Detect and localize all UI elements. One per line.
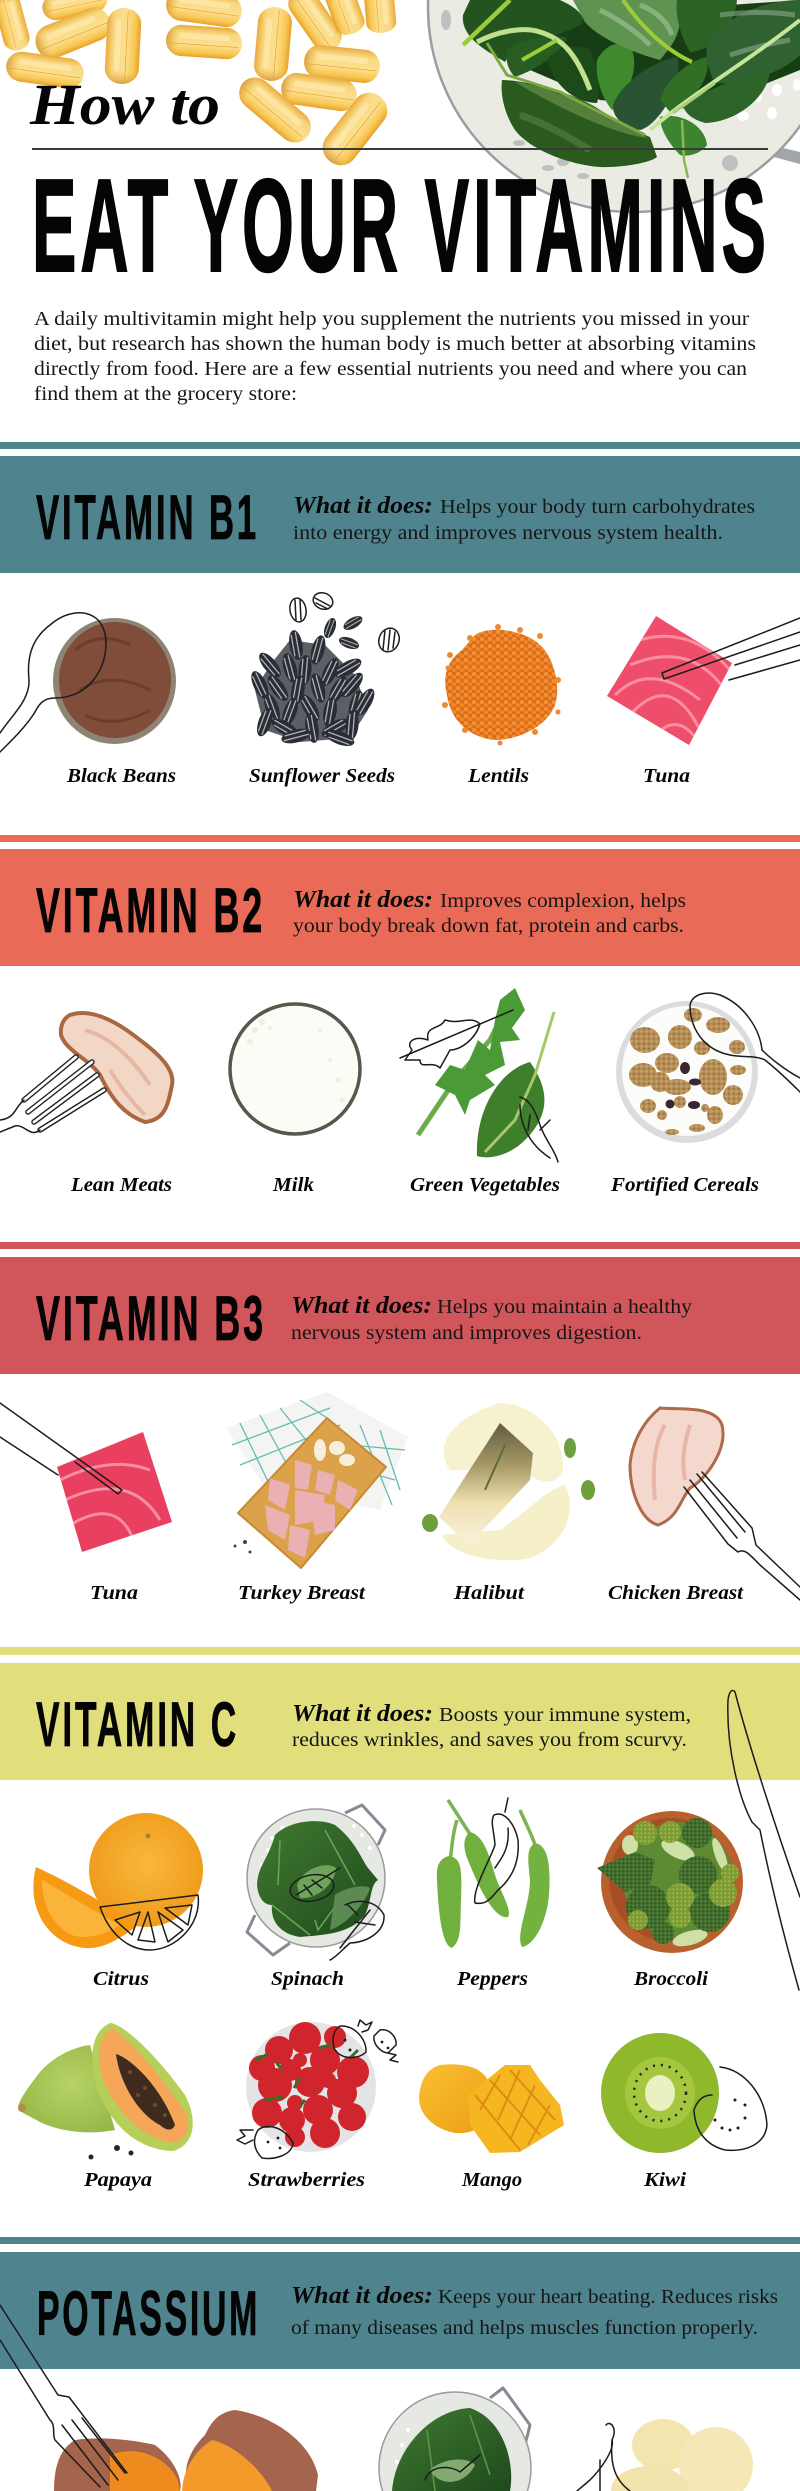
food: bananas: [577, 2419, 753, 2491]
heading: vitamin c: VITAMIN C: [36, 1690, 239, 1760]
description: b1: What it does:: [293, 493, 433, 519]
food: black beans: [0, 613, 176, 752]
description: b1: into energy and improves nervous system health.: [293, 522, 723, 544]
label: sunflower seeds: Sunflower Seeds: [249, 765, 395, 787]
intro paragraph: find them at the grocery store:: [34, 383, 297, 405]
label: spinach: Spinach: [271, 1968, 344, 1990]
description: b3: Helps you maintain a healthy: [437, 1296, 692, 1318]
food: spinach colander: [379, 2388, 531, 2491]
food: mango: [419, 2064, 564, 2153]
description: potassium: [291, 2283, 778, 2339]
label: halibut: Halibut: [453, 1582, 526, 1604]
label: green vegetables: Green Vegetables: [410, 1174, 560, 1196]
description: b3: What it does:: [291, 1293, 432, 1319]
food: citrus: [33, 1813, 203, 1950]
description: potassium: What it does:: [291, 2283, 433, 2309]
description: b2: [293, 887, 686, 937]
label: broccoli: Broccoli: [633, 1968, 708, 1990]
description: b1: [293, 493, 755, 544]
food: strawberries: [237, 2020, 398, 2158]
header photo: colander of spinach: [428, 0, 800, 212]
description: vitamin c: reduces wrinkles, and saves you from scurvy.: [292, 1729, 687, 1751]
title rule: [32, 148, 768, 150]
intro paragraph: [34, 308, 756, 405]
panel: vitamin b2: [0, 835, 800, 1196]
label: papaya: Papaya: [83, 2169, 152, 2191]
food: lean meats: [0, 1013, 172, 1132]
food: kiwi: [601, 2033, 767, 2153]
food: broccoli: [597, 1811, 743, 1953]
description: b3: [291, 1293, 692, 1344]
label: peppers: Peppers: [456, 1968, 528, 1990]
description: b3: nervous system and improves digestion.: [291, 1322, 642, 1344]
label: chicken breast: Chicken Breast: [608, 1582, 745, 1604]
food: chicken breast: [630, 1408, 800, 1600]
description: vitamin c: What it does:: [292, 1701, 433, 1727]
panel: potassium: [0, 2237, 800, 2491]
label: lean meats: Lean Meats: [70, 1174, 172, 1196]
heading: vitamin b3: VITAMIN B3: [36, 1284, 266, 1354]
heading: vitamin b2: VITAMIN B2: [36, 876, 265, 946]
label: mango: Mango: [461, 2169, 522, 2191]
label: milk: Milk: [272, 1174, 314, 1196]
food: milk: [230, 1004, 360, 1134]
description: b2: Improves complexion, helps: [440, 890, 686, 912]
label: lentils: Lentils: [467, 765, 529, 787]
food: lentils: [442, 624, 561, 746]
food: turkey breast: [226, 1392, 408, 1568]
panel: vitamin b3: [0, 1242, 800, 1604]
label: citrus: Citrus: [93, 1968, 149, 1990]
description: b2: your body break down fat, protein and carbs.: [293, 915, 684, 937]
intro paragraph: diet, but research has shown the human body is much better at absorbing vitamins: [34, 333, 756, 355]
food: tuna: [607, 616, 800, 745]
food: fortified cereals: [616, 993, 800, 1143]
label: tuna: Tuna: [643, 765, 690, 787]
description: b2: What it does:: [293, 887, 433, 913]
description: potassium: Keeps your heart beating. Reduces risks: [438, 2286, 778, 2308]
heading: vitamin b1: VITAMIN B1: [36, 483, 259, 553]
food: tuna: [0, 1403, 172, 1552]
heading: potassium: POTASSIUM: [37, 2279, 260, 2349]
description: b1: Helps your body turn carbohydrates: [440, 496, 755, 518]
panel: vitamin b1: [0, 442, 800, 787]
description: potassium: of many diseases and helps muscles function properly.: [291, 2317, 758, 2339]
food: green vegetables: [400, 988, 558, 1162]
label: black beans: Black Beans: [66, 765, 176, 787]
label: strawberries: Strawberries: [248, 2169, 365, 2191]
food: papaya: [18, 2023, 193, 2160]
food: sunflower seeds: [248, 590, 403, 749]
label: tuna: Tuna: [90, 1582, 138, 1604]
icon: knife sketch: [728, 1690, 800, 1990]
description: vitamin c: Boosts your immune system,: [439, 1704, 691, 1726]
food: halibut: [422, 1403, 595, 1560]
label: turkey breast: Turkey Breast: [238, 1582, 367, 1604]
intro paragraph: directly from food. Here are a few essential nutrients you need and where you can: [34, 358, 747, 380]
description: vitamin c: [292, 1701, 691, 1751]
label: kiwi: Kiwi: [643, 2169, 686, 2191]
label: fortified cereals: Fortified Cereals: [610, 1174, 759, 1196]
food: peppers: [437, 1798, 550, 1948]
title: how to: How to: [29, 72, 220, 137]
food: sweet potato: [0, 2305, 318, 2491]
panel: vitamin c: [0, 1647, 800, 2191]
header photo: vitamin capsules: [0, 0, 397, 172]
food: spinach: [247, 1805, 385, 1960]
intro paragraph: A daily multivitamin might help you supplement the nutrients you missed in your: [34, 308, 749, 330]
